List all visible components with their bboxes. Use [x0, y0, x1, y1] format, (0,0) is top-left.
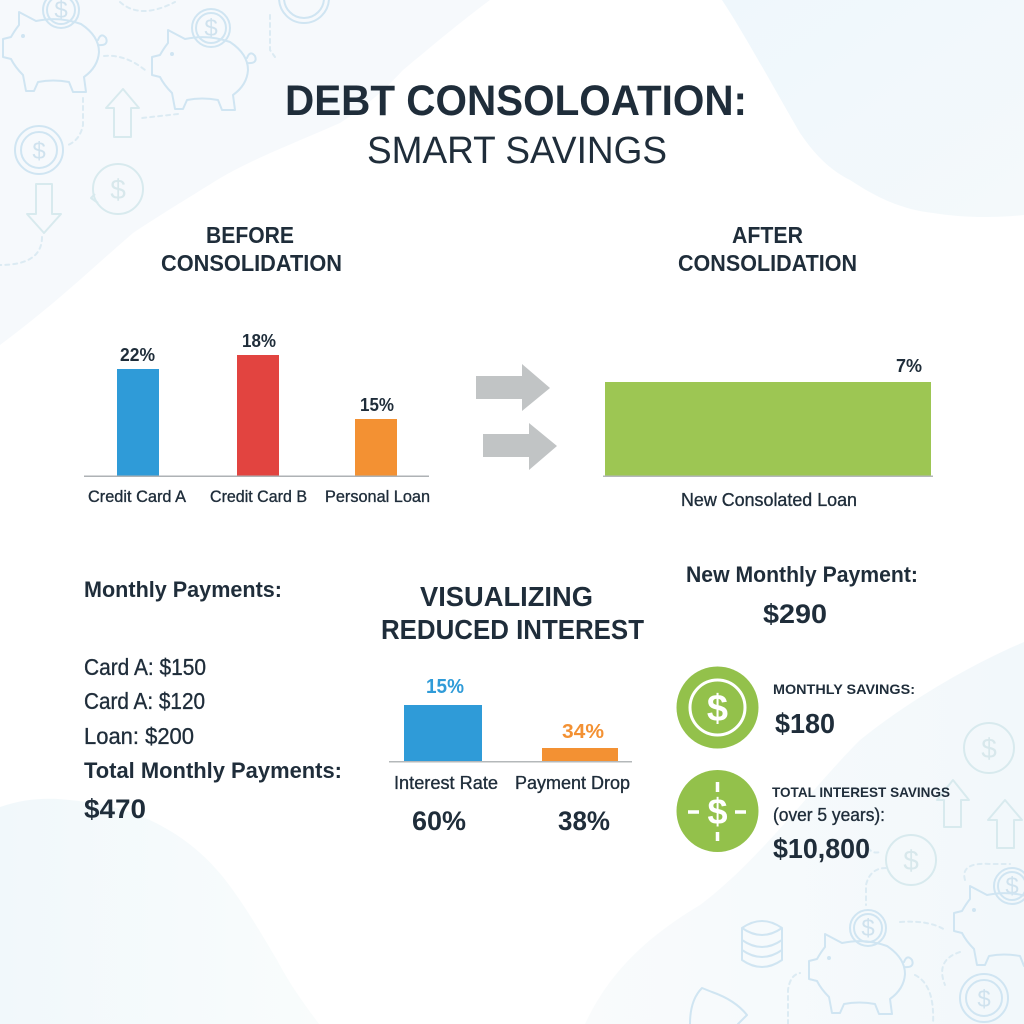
decorative icons: top left: [0, 0, 329, 265]
bar chart: before consolidation: Personal Loan: [325, 487, 430, 506]
callout: total interest savings: [772, 784, 950, 864]
text block: monthly payments: Total Monthly Payments:: [84, 758, 342, 783]
decorative icons: bottom right: [690, 723, 1024, 1024]
icon: dollar coin: [676, 666, 758, 748]
heading: after consolidation: CONSOLIDATION: [678, 250, 857, 276]
text block: monthly payments: Monthly Payments:: [84, 577, 282, 602]
decorative icons: bottom right: $: [977, 986, 991, 1013]
heading: visualizing reduced interest: REDUCED INTEREST: [381, 614, 644, 645]
bar chart: before consolidation: Credit Card A: [88, 487, 187, 506]
bar chart: before consolidation: 22%: [120, 345, 155, 365]
heading: before consolidation: BEFORE: [206, 222, 294, 248]
bar chart: after consolidation: New Consolated Loan: [681, 490, 857, 510]
heading: visualizing reduced interest: VISUALIZING: [420, 581, 593, 612]
heading: visualizing reduced interest: [381, 581, 644, 645]
callout: monthly savings: $180: [775, 708, 835, 739]
decorative icons: top left: $: [110, 174, 126, 205]
callout: total interest savings: $10,800: [773, 833, 870, 864]
title: SMART SAVINGS: [367, 130, 667, 172]
bar chart: after consolidation: [603, 356, 933, 510]
bar chart: reduced interest: Interest Rate: [394, 773, 498, 793]
bar chart: reduced interest: Payment Drop: [515, 773, 630, 793]
text block: new monthly payment: [686, 562, 918, 629]
bar chart: before consolidation: 18%: [242, 331, 276, 351]
text block: monthly payments: [84, 577, 342, 824]
heading: before consolidation: [161, 222, 342, 276]
bar chart: before consolidation: [84, 331, 430, 506]
decorative icons: top left: $: [204, 15, 218, 42]
decorative icons: bottom right: $: [903, 845, 919, 876]
icon: dollar target: [676, 770, 758, 852]
text block: new monthly payment: $290: [763, 599, 827, 629]
decorative icons: top left: $: [32, 138, 46, 165]
callout: total interest savings: (over 5 years):: [773, 805, 885, 825]
bar chart: before consolidation: Credit Card B: [210, 487, 307, 506]
icon: dollar coin: $: [707, 688, 728, 730]
callout: total interest savings: TOTAL INTEREST SAVINGS: [772, 784, 950, 800]
decorative icons: bottom right: $: [861, 915, 875, 942]
callout: monthly savings: MONTHLY SAVINGS:: [773, 681, 915, 697]
arrow: lower: [483, 423, 557, 470]
bar chart: reduced interest: 60%: [412, 806, 466, 836]
heading: after consolidation: [678, 222, 857, 276]
bar chart: reduced interest: 38%: [558, 806, 610, 836]
icon: dollar target: $: [707, 791, 728, 832]
decorative icons: bottom right: $: [981, 733, 997, 764]
text block: monthly payments: Loan: $200: [84, 723, 194, 749]
callout: monthly savings: [773, 681, 915, 739]
title: [285, 77, 747, 172]
text block: new monthly payment: New Monthly Payment:: [686, 562, 918, 587]
heading: before consolidation: CONSOLIDATION: [161, 250, 342, 276]
arrow: upper: [476, 364, 550, 411]
text block: monthly payments: Card A: $120: [84, 688, 205, 714]
title: DEBT CONSOLOATION:: [285, 77, 747, 125]
bar chart: reduced interest: 34%: [562, 721, 604, 743]
bar chart: after consolidation: 7%: [896, 356, 922, 376]
bar chart: before consolidation: 15%: [360, 395, 394, 415]
text block: monthly payments: Card A: $150: [84, 654, 206, 680]
decorative icons: bottom right: $: [1005, 873, 1019, 900]
text block: monthly payments: $470: [84, 794, 146, 824]
heading: after consolidation: AFTER: [732, 222, 803, 248]
bar chart: reduced interest: [389, 676, 632, 836]
bar chart: reduced interest: 15%: [426, 676, 464, 698]
